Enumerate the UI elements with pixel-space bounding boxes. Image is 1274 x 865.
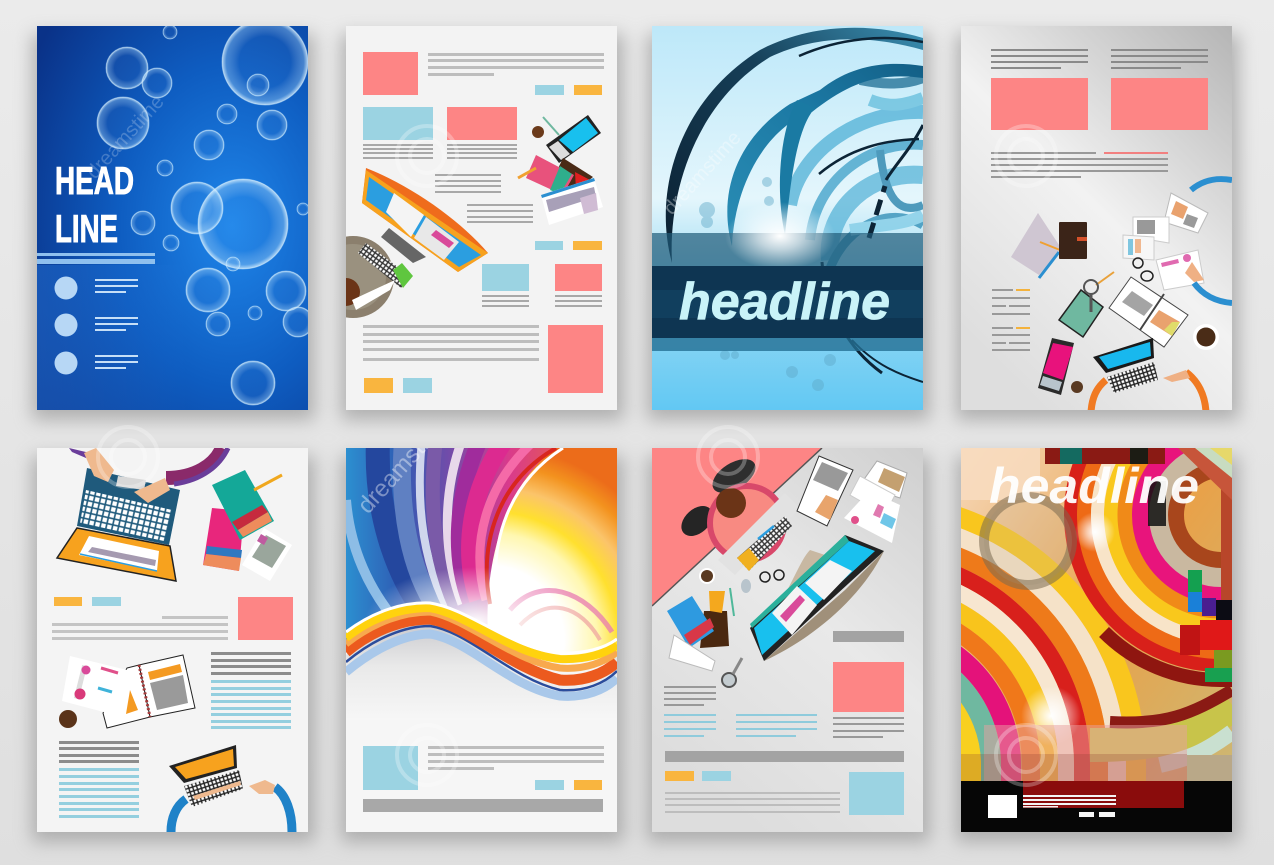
headline: headline [679, 273, 890, 331]
icon: diagonal monitor [750, 535, 884, 661]
watermark [98, 126, 1056, 785]
icon: glasses [1133, 258, 1153, 281]
icon: coffee [1193, 324, 1219, 350]
icon: glasses and coffee [699, 568, 784, 593]
list bullets [54, 276, 78, 374]
outer crescent [666, 28, 923, 263]
watermark text: dreamstime [659, 127, 746, 219]
headline: headline [989, 458, 1199, 514]
rainbow rays [346, 448, 533, 610]
dots [699, 177, 836, 391]
upper-right rings [1071, 365, 1232, 680]
icon: report and organizer [1011, 213, 1087, 278]
panel: blue bubbles flyer: LINE [55, 208, 118, 251]
panel: grey workspace flyer [961, 26, 1232, 412]
bubbles [97, 19, 313, 405]
panel: rainbow wave flyer [346, 408, 617, 832]
right edge colour patches [1148, 448, 1232, 682]
icon: laptop [57, 468, 180, 581]
panel: colourful rings flyer [874, 365, 1232, 832]
second crescent [727, 64, 923, 246]
icon: papers with blue arm [1123, 179, 1232, 303]
icon: phone [1038, 338, 1074, 395]
icon: open notebook [1109, 277, 1188, 347]
icon: tablet and magnifier [1059, 272, 1114, 337]
thin dark strokes [799, 38, 923, 382]
text lines [992, 289, 1030, 351]
icon: desk items [518, 115, 603, 225]
sunburst [487, 448, 617, 660]
icon: books and sheet [203, 470, 292, 581]
wave [346, 601, 617, 701]
icon: monitor [362, 168, 488, 272]
icon: books and phone [667, 588, 742, 687]
panel: white workspace flyer [316, 26, 617, 410]
footer block [988, 795, 1116, 818]
icon: small laptop with arms [169, 745, 292, 832]
icon: person with chair and keyboard [346, 236, 413, 318]
icon: laptop and hands [1091, 338, 1206, 412]
panel: white laptop flyer [37, 448, 308, 832]
panel: teal swirl headline flyer [652, 26, 923, 410]
icon: sleeves and hands [69, 448, 228, 503]
lower right bands [1090, 690, 1232, 765]
icon: person at desk [676, 452, 800, 575]
icon: keyboard [737, 516, 792, 571]
panel: blue bubbles flyer [37, 19, 313, 410]
grey ring [984, 497, 1072, 585]
lower-left rings [874, 503, 1136, 790]
watermark text: dreamstime [82, 91, 169, 183]
panel: diagonal workspace flyer [652, 448, 923, 832]
headline: HEAD [55, 160, 134, 203]
leaf [780, 100, 815, 235]
watermark text: dreamstime [352, 408, 456, 519]
icon: notebook and papers [797, 456, 907, 543]
icon: report and notebook [59, 655, 195, 728]
top blocks and corners [961, 448, 1232, 500]
ribbons [790, 78, 923, 290]
